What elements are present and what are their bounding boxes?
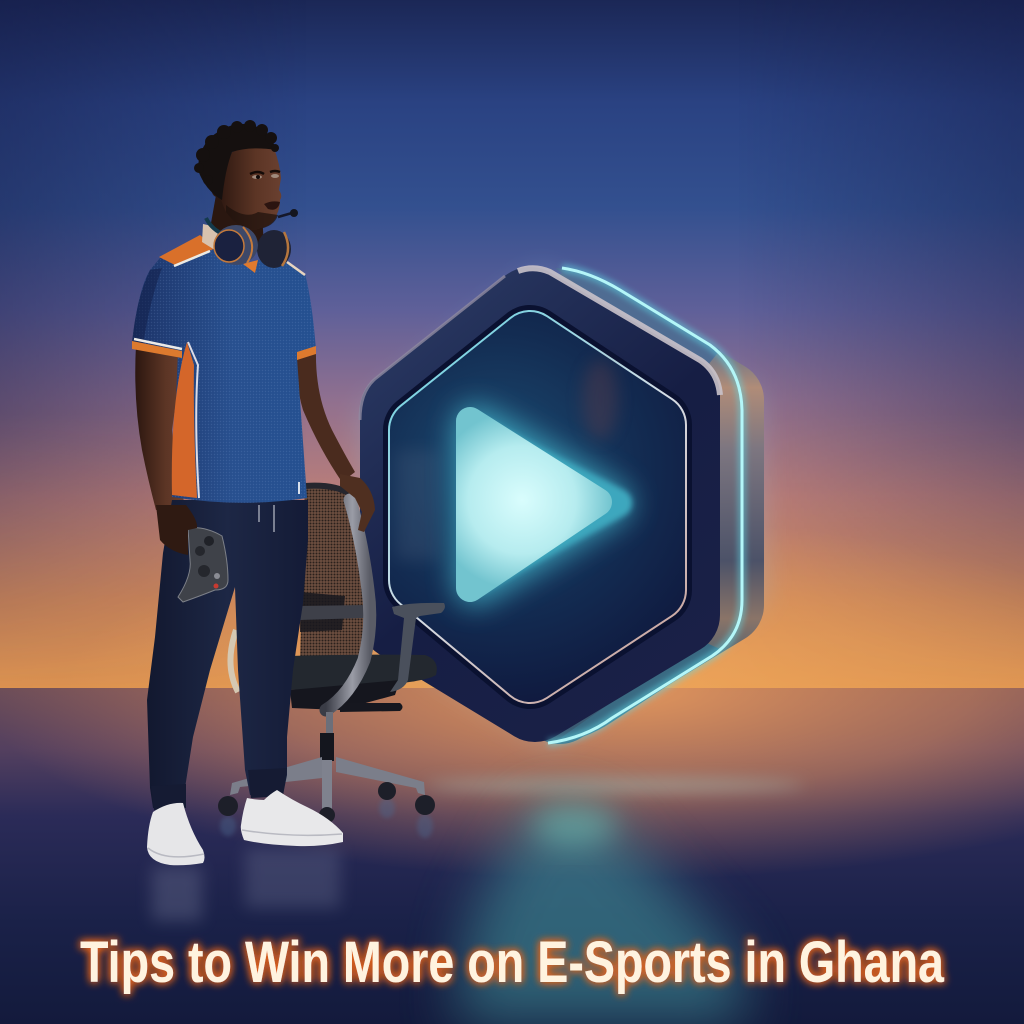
jersey collar orange V xyxy=(243,260,258,273)
play triangle xyxy=(470,421,598,588)
jersey orange shoulder xyxy=(159,235,216,265)
right sneaker xyxy=(241,790,343,846)
chair mechanism xyxy=(290,680,400,710)
chair back top xyxy=(305,486,350,494)
jersey xyxy=(132,235,316,503)
left arm xyxy=(135,345,186,510)
head xyxy=(218,146,281,229)
rim upper highlight xyxy=(518,268,720,395)
chair left frame xyxy=(230,630,238,692)
play triangle glow xyxy=(475,425,612,586)
play triangle offset shade xyxy=(480,432,618,578)
hexagon glow xyxy=(360,268,765,745)
hair xyxy=(194,120,279,200)
hexagon play badge xyxy=(360,268,765,745)
hexagon inner face xyxy=(420,342,655,672)
hexagon lower back band xyxy=(552,640,722,744)
left sneaker xyxy=(147,803,204,865)
caster reflections xyxy=(220,798,433,838)
beard shade xyxy=(226,205,278,229)
chair base xyxy=(230,757,425,795)
number on hem xyxy=(298,482,300,494)
left hand xyxy=(156,505,197,555)
inner face edge line xyxy=(420,342,655,672)
jersey orange side panel xyxy=(172,342,197,498)
eyes and mouth xyxy=(250,171,280,210)
chair frame xyxy=(326,500,370,710)
reflective floor xyxy=(0,688,1024,1024)
rim left edge highlight xyxy=(360,276,505,420)
hexagon front rim xyxy=(400,307,680,702)
jersey mesh texture xyxy=(132,235,316,503)
player figure xyxy=(132,120,375,865)
chair column xyxy=(320,712,334,810)
light streak on floor xyxy=(425,779,805,791)
right hand xyxy=(340,474,375,532)
hexagon upper back band xyxy=(555,268,720,375)
drawstrings xyxy=(259,505,274,532)
casters xyxy=(218,782,435,823)
background sky gradient xyxy=(0,0,1024,690)
chair armrest xyxy=(390,603,445,692)
right shoulder trim xyxy=(287,262,305,275)
sleeve shade xyxy=(132,268,162,345)
right arm xyxy=(297,350,355,482)
microphone xyxy=(278,213,292,217)
pants xyxy=(147,500,308,808)
cyan neon rim xyxy=(548,268,742,743)
hexagon reflection xyxy=(455,802,745,1024)
office chair xyxy=(218,486,445,823)
headphones xyxy=(202,209,298,268)
pants cuffs xyxy=(151,768,287,810)
shoe reflections xyxy=(152,866,202,921)
ear xyxy=(211,177,223,197)
chair back mesh xyxy=(300,486,366,660)
lumbar support xyxy=(300,592,345,632)
inner groove xyxy=(420,342,655,672)
hexagon back layer xyxy=(500,310,725,705)
neck xyxy=(208,195,264,266)
sleeve trims xyxy=(132,339,316,360)
chair seat xyxy=(290,655,437,690)
face reflections xyxy=(395,360,618,560)
game controller xyxy=(178,528,228,602)
chair lever xyxy=(340,703,402,712)
